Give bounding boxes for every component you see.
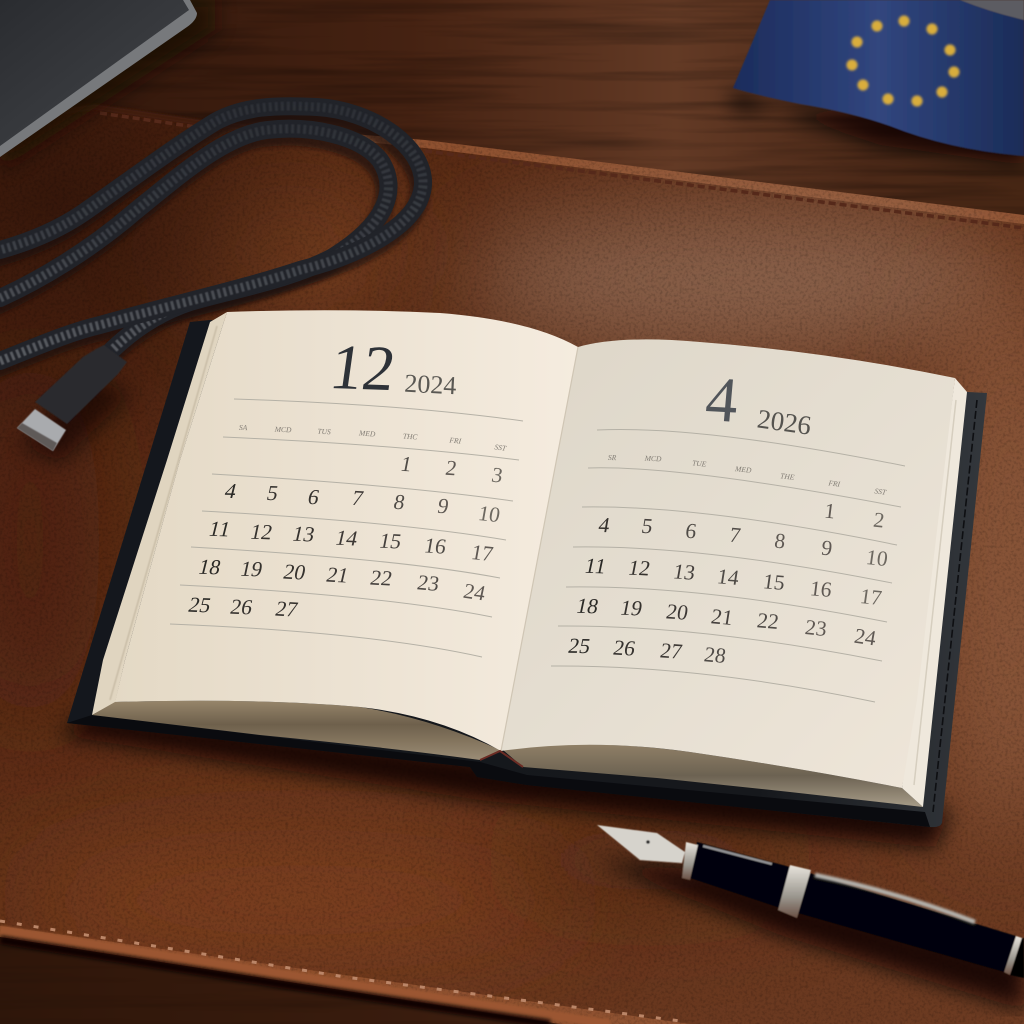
day numbers: 12	[626, 556, 652, 580]
day numbers: 19	[238, 557, 265, 581]
year 2024: 2024	[404, 369, 457, 400]
day numbers: 17	[469, 540, 495, 566]
right calendar page: April 2026	[551, 363, 905, 702]
day numbers: 27	[658, 638, 684, 664]
left page	[115, 310, 578, 751]
day numbers: 7	[728, 523, 743, 547]
weekday labels: MCD	[274, 425, 292, 434]
day numbers: 4	[597, 513, 612, 537]
day numbers: 26	[228, 595, 255, 619]
weekday labels: SST	[494, 442, 508, 453]
day numbers: 4	[222, 479, 239, 503]
day numbers: 2	[872, 508, 886, 533]
day numbers	[186, 452, 505, 621]
day numbers: 24	[461, 579, 488, 605]
weekday labels: SST	[874, 486, 888, 497]
day numbers: 9	[820, 536, 834, 560]
ruled lines	[170, 399, 523, 657]
day numbers: 14	[333, 526, 360, 550]
day numbers: 9	[436, 494, 451, 518]
weekday labels	[239, 423, 508, 453]
day numbers: 7	[350, 486, 366, 510]
pen end ring	[1004, 936, 1022, 975]
weekday labels: FRI	[448, 435, 462, 446]
notebook cover	[67, 320, 987, 827]
spine headband	[480, 751, 523, 767]
day numbers: 19	[618, 596, 644, 620]
right page edge stack	[902, 378, 967, 807]
spine crease	[501, 347, 578, 751]
day numbers: 22	[756, 608, 780, 634]
tablet device corner	[0, 0, 215, 170]
cable strand inner	[0, 129, 389, 350]
day numbers: 11	[206, 517, 233, 541]
day numbers: 22	[368, 566, 394, 590]
pen barrel	[690, 842, 1016, 972]
left page fold line	[110, 326, 217, 700]
right fore-edge underside	[503, 744, 923, 807]
day numbers: 16	[422, 533, 448, 559]
left calendar page: December 2024	[170, 331, 523, 657]
braided cable	[0, 106, 423, 368]
left fore-edge underside	[92, 701, 500, 760]
day numbers: 17	[859, 584, 884, 610]
day numbers: 25	[566, 634, 592, 658]
day numbers: 26	[611, 636, 638, 661]
day numbers: 2	[444, 456, 459, 480]
day numbers: 3	[490, 463, 505, 487]
left page edge stack	[92, 312, 227, 715]
day numbers: 8	[773, 529, 787, 553]
day numbers: 1	[399, 452, 414, 476]
day numbers: 5	[640, 514, 654, 538]
day numbers: 18	[574, 594, 601, 618]
day numbers: 16	[809, 576, 833, 602]
weekday labels: SR	[608, 453, 617, 462]
bottom stitching	[0, 921, 688, 1022]
day numbers: 11	[583, 554, 608, 578]
weekday labels: TUE	[692, 458, 707, 469]
month number 12: 12	[326, 331, 400, 404]
day numbers: 6	[306, 485, 322, 509]
weekday labels: MCD	[644, 454, 662, 463]
day numbers: 12	[248, 520, 275, 544]
day numbers	[566, 499, 889, 668]
day numbers: 24	[852, 624, 878, 650]
day numbers: 10	[865, 545, 889, 571]
day numbers: 18	[196, 555, 224, 579]
day numbers: 8	[392, 490, 407, 514]
day numbers: 6	[684, 519, 698, 543]
cable strand outer	[0, 106, 423, 361]
cover bottom strip	[67, 715, 930, 827]
weekday labels: MED	[734, 464, 752, 475]
weekday labels: THE	[780, 471, 795, 482]
pad edge shadow	[0, 940, 550, 1024]
pen nib	[597, 825, 685, 863]
dark upper-left pad edge	[0, 107, 320, 134]
day numbers: 20	[664, 599, 690, 625]
day numbers: 27	[273, 597, 300, 621]
day numbers: 23	[415, 570, 441, 596]
day numbers: 25	[186, 593, 214, 617]
day numbers: 1	[823, 499, 837, 523]
weekday labels: FRI	[827, 478, 841, 489]
weekday labels: THC	[403, 432, 419, 442]
year 2026: 2026	[755, 403, 813, 441]
day numbers: 13	[290, 522, 317, 546]
notebook	[60, 310, 987, 848]
weekday labels: MED	[358, 428, 376, 439]
day numbers: 23	[804, 615, 828, 641]
day numbers: 15	[377, 529, 403, 553]
flag stars	[846, 16, 960, 106]
month number 4: 4	[703, 363, 741, 436]
day numbers: 10	[476, 501, 502, 527]
weekday labels: TUS	[317, 427, 331, 436]
day numbers: 14	[716, 564, 741, 590]
day numbers: 15	[762, 569, 786, 595]
ruled lines	[551, 429, 905, 702]
weekday labels: SA	[239, 423, 248, 432]
cover stitch	[933, 400, 977, 812]
day numbers: 21	[324, 563, 351, 587]
USB-C connector	[17, 345, 130, 462]
day numbers: 28	[703, 642, 728, 668]
weekday labels	[608, 453, 888, 497]
right page fold line	[914, 400, 956, 785]
day numbers: 21	[710, 604, 735, 630]
right page	[501, 339, 955, 788]
day numbers: 13	[671, 559, 697, 585]
day numbers: 5	[265, 481, 280, 505]
pen rings	[682, 842, 698, 880]
fountain pen	[597, 825, 1024, 1010]
day numbers: 20	[281, 560, 308, 584]
bottom edge lip	[0, 930, 610, 1024]
top stitching	[100, 113, 1024, 228]
EU flag	[733, 0, 1024, 165]
